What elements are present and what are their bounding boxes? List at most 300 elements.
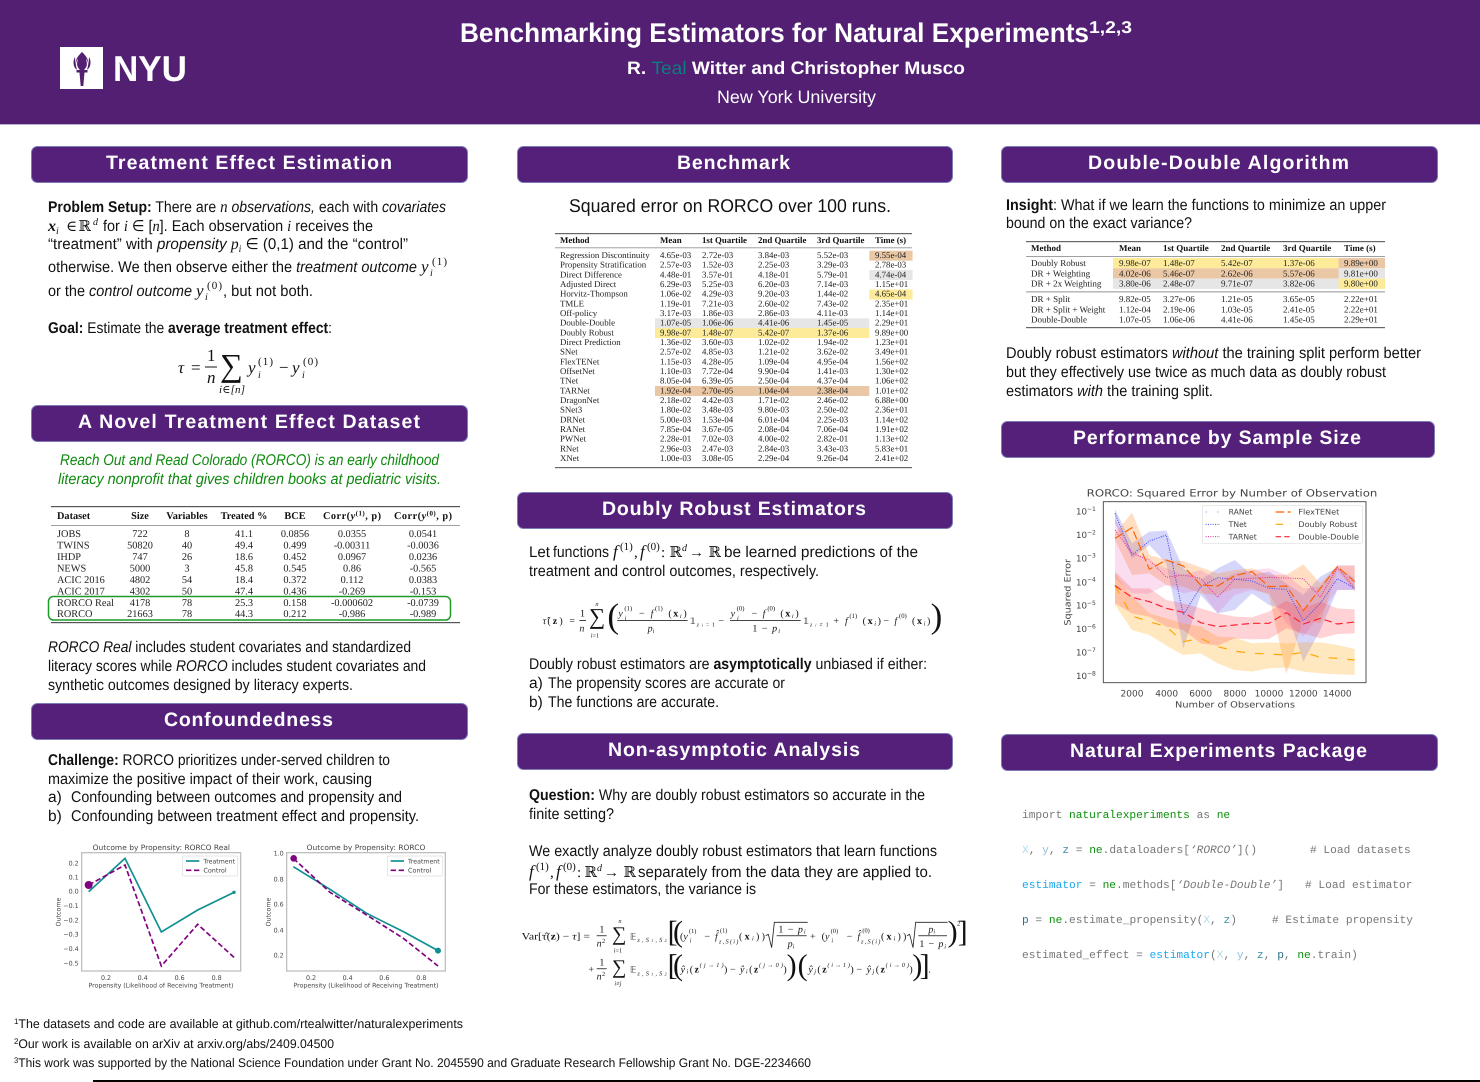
table: datasets: 3	[184, 564, 190, 574]
text block: asymptotically unbiased: b)	[529, 694, 543, 711]
table: double-double comparison: Time (s)	[1344, 243, 1376, 253]
code block: package usage	[1022, 809, 1413, 962]
chart: outcome by propensity RORCO: Outcome	[265, 898, 272, 926]
chart: squared error by number of observations: −4	[1087, 576, 1096, 583]
chart: outcome by propensity RORCO: 0.2	[306, 974, 316, 982]
table: benchmark results: SNet	[560, 347, 578, 357]
heading: A Novel Treatment Effect Dataset: A Novel Treatment Effect Dataset	[78, 411, 420, 433]
table: benchmark results: 2.86e-03	[758, 308, 790, 318]
table: benchmark results: 1.45e-05	[817, 318, 849, 328]
table: benchmark results: 1.80e-02	[660, 405, 691, 415]
table: benchmark results: 3.49e+01	[875, 347, 908, 357]
table: double-double comparison: 2.22e+01	[1344, 294, 1378, 304]
table: benchmark results: 1.37e-06	[817, 327, 849, 337]
formula: variance: ]	[958, 915, 968, 948]
table: datasets: 50	[182, 586, 192, 598]
table: double-double comparison: 5.42e-07	[1221, 258, 1253, 268]
code block: package usage: # Estimate propensity	[1272, 914, 1413, 927]
chart: outcome by propensity RORCO Real: Outcome by Propensity: RORCO Real	[93, 844, 230, 852]
formula: average treatment effect: −	[279, 358, 289, 377]
table: datasets: 0.212	[283, 609, 307, 620]
chart: outcome by propensity RORCO Real: −0.1	[63, 902, 79, 910]
formula: variance: (i→1)	[827, 962, 850, 969]
table: benchmark results: 1.04e-04	[758, 385, 790, 395]
table: double-double comparison: 4.41e-06	[1221, 315, 1253, 325]
formula: variance: n	[597, 938, 602, 949]
table: double-double comparison: 9.80e+00	[1344, 279, 1378, 289]
table: benchmark results: XNet	[560, 453, 580, 463]
text block: challenge: a)	[48, 789, 62, 806]
table: datasets: 25.3	[235, 598, 253, 609]
table: double-double comparison: 1.06e-06	[1163, 315, 1195, 325]
table: datasets: -0.986	[339, 609, 365, 620]
chart: outcome by propensity RORCO: 0.4	[274, 927, 284, 934]
table: datasets: 0.545	[283, 564, 307, 574]
table: benchmark results: 9.89e+00	[875, 327, 909, 337]
table: benchmark results: 6.39e-05	[702, 376, 734, 386]
formula: doubly robust estimator: f	[651, 608, 655, 619]
table: double-double comparison: 2.29e+01	[1344, 315, 1378, 325]
text block: learned functions: ,	[634, 545, 638, 561]
formula: doubly robust estimator: (x	[668, 608, 678, 619]
formula: doubly robust estimator: 1	[580, 608, 585, 619]
table: datasets: 0.0856	[281, 529, 309, 540]
formula: doubly robust estimator: (0)	[737, 605, 744, 612]
chart: outcome by propensity RORCO Real: −0.4	[63, 945, 79, 953]
formula: doubly robust estimator: −	[883, 615, 889, 626]
text block: question: finite setting?	[529, 806, 614, 823]
table: benchmark results: Direct Prediction	[560, 337, 621, 347]
table: datasets: -0.565	[410, 564, 436, 574]
logo: NYU	[60, 47, 187, 89]
text block: RORCO description: Reach Out and Read Colorado (RORCO) is an early childhood	[60, 452, 440, 469]
table: datasets: 0.0355	[338, 529, 366, 540]
formula: variance: ŷ	[807, 964, 813, 975]
chart: squared error by number of observations: 10	[1076, 671, 1087, 681]
table: benchmark results: Mean	[660, 235, 682, 245]
formula: doubly robust estimator: y	[617, 608, 623, 619]
text block: exact analysis: → ℝ	[604, 865, 637, 881]
heading: Natural Experiments Package: Natural Experiments Package	[1070, 740, 1367, 762]
formula: variance: 𝔼	[630, 932, 636, 942]
text block: problem setup: d	[93, 217, 99, 228]
text block: problem setup: (1)	[432, 256, 447, 268]
text block: problem setup: y	[419, 257, 429, 276]
table: benchmark results: 1.21e-02	[758, 347, 789, 357]
table: benchmark results: 4.11e-03	[817, 308, 848, 318]
table: datasets: 18.4	[235, 575, 253, 586]
text block: learned functions: f	[613, 542, 620, 561]
formula: variance: (j→0)	[759, 962, 783, 969]
table: double-double comparison: 2.62e-06	[1221, 268, 1253, 278]
table: benchmark results: 1.41e-03	[817, 366, 849, 376]
table: datasets: Dataset	[57, 511, 91, 522]
table: benchmark results: 2.41e+02	[875, 453, 908, 463]
table: benchmark results: 3.08e-05	[702, 453, 734, 463]
table: benchmark results: 2.96e-03	[660, 443, 692, 453]
table: benchmark results: 1.19e-01	[660, 298, 691, 308]
formula: variance: )	[948, 915, 958, 948]
table: double-double comparison	[1026, 241, 1385, 328]
formula: doubly robust estimator: i=1	[591, 632, 599, 639]
formula: average treatment effect: i	[258, 370, 261, 381]
text block: problem setup	[47, 197, 447, 303]
formula: variance: +	[810, 931, 816, 942]
text block: exact analysis: ,	[550, 865, 554, 881]
table: benchmark results: 3rd Quartile	[817, 235, 864, 245]
table: benchmark results: 1.53e-04	[702, 414, 734, 424]
table: datasets: 50820	[127, 540, 153, 552]
text block: asymptotically unbiased: a)	[529, 675, 543, 692]
text block: problem setup: i	[56, 226, 59, 237]
table: benchmark results: 3.62e-02	[817, 347, 848, 357]
chart: outcome by propensity RORCO Real: −0.5	[63, 960, 79, 967]
table: benchmark results: Time (s)	[875, 235, 906, 245]
formula: variance: z,S(i)	[719, 938, 738, 945]
table: double-double comparison: 1.12e-04	[1119, 304, 1151, 314]
title: 1,2,3	[1089, 18, 1132, 37]
table: double-double comparison: 9.98e-07	[1119, 258, 1151, 268]
table: benchmark results: 2.50e-02	[817, 405, 848, 415]
formula: doubly robust estimator: y	[730, 608, 735, 619]
legend	[1202, 506, 1362, 543]
formula: variance: ]	[920, 949, 930, 982]
formula: variance: 1 − p	[778, 924, 803, 935]
formula: variance: i	[933, 928, 935, 935]
formula: variance: y	[824, 931, 830, 942]
table: datasets: 44.3	[235, 609, 253, 620]
chart: squared error by number of observations: Number of Observations	[1175, 700, 1295, 710]
heading: Doubly Robust Estimators: Doubly Robust Estimators	[602, 498, 866, 520]
text block: exact analysis: : ℝ	[577, 865, 598, 881]
formula: variance: )	[724, 964, 727, 975]
table: benchmark results: 2.28e-01	[660, 434, 691, 444]
legend: Doubly Robust	[1298, 520, 1357, 529]
table: datasets: 0.0541	[409, 529, 437, 540]
table: benchmark results: 1.71e-02	[758, 395, 789, 405]
formula: variance	[522, 915, 968, 987]
chart: squared error by number of observations: −8	[1087, 670, 1096, 677]
table: benchmark results: 2.29e+01	[875, 318, 908, 328]
table: benchmark results: 6.20e-03	[758, 279, 790, 289]
table: benchmark results: 2.70e-05	[702, 385, 734, 395]
formula: variance: )	[787, 949, 797, 982]
table: datasets: , p)	[436, 511, 452, 522]
table: double-double comparison: 1.37e-06	[1283, 258, 1315, 268]
code block: package usage: # Load estimator	[1305, 879, 1412, 892]
text block: training split	[1006, 345, 1421, 400]
table: benchmark results: 2.84e-03	[758, 443, 790, 453]
formula: variance: (x	[739, 931, 750, 942]
text block: problem setup: or the control outcome	[48, 283, 192, 300]
heading: Non-asymptotic Analysis	[518, 734, 952, 770]
chart: outcome by propensity RORCO Real: Outcome	[55, 898, 62, 926]
formula: variance: i	[687, 968, 688, 975]
formula: variance: .	[928, 964, 931, 975]
formula: doubly robust estimator: zi=1	[696, 621, 715, 628]
table: benchmark results: 4.18e-01	[758, 269, 789, 279]
chart: outcome by propensity RORCO Real: 0.0	[69, 888, 79, 895]
formula: variance: i≠j	[614, 980, 621, 987]
code block: package usage: X, y, z = ne.dataloaders[‘RORCO’]()	[1022, 844, 1257, 857]
table: benchmark results: 7.43e-02	[817, 298, 848, 308]
table: benchmark results: 9.55e-04	[875, 250, 907, 260]
text block: asymptotically unbiased	[529, 656, 927, 711]
formula: doubly robust estimator: i	[737, 615, 739, 622]
text block: asymptotically unbiased: Doubly robust estimators are asymptotically unbiased if either:	[529, 656, 927, 673]
text block: exact analysis: separately from the data they are applied to.	[638, 864, 932, 881]
table: benchmark results: 5.00e-03	[660, 414, 692, 424]
formula: doubly robust estimator: (x	[863, 615, 873, 626]
text block: RORCO description	[58, 452, 441, 488]
table: benchmark results: 1.06e-06	[702, 318, 734, 328]
table: datasets: 0.499	[283, 540, 307, 552]
table: datasets: (1)	[356, 510, 365, 518]
formula: variance: )	[783, 964, 787, 975]
code block: package usage: import naturalexperiments as ne	[1022, 809, 1230, 822]
table: benchmark results: 7.72e-04	[702, 366, 734, 376]
formula: doubly robust estimator: p	[648, 623, 653, 634]
formula: variance: (i→0)	[886, 962, 909, 969]
table: benchmark results: 4.65e-04	[875, 289, 907, 299]
logo: NYU: NYU	[113, 48, 187, 89]
formula: doubly robust estimator: (	[607, 596, 619, 635]
table: double-double comparison: DR + Split	[1031, 294, 1071, 304]
formula: doubly robust estimator: i	[924, 620, 925, 627]
text block: training split: Doubly robust estimators without the training split perform better	[1006, 345, 1421, 362]
formula: doubly robust estimator: 𝟙	[690, 616, 696, 626]
table: benchmark results: 9.90e-04	[758, 366, 790, 376]
chart: squared error by number of observations: Squared Error	[1063, 559, 1073, 626]
text block: exact analysis: f	[556, 862, 563, 881]
table: double-double comparison: 1.03e-05	[1221, 304, 1253, 314]
heading: Non-asymptotic Analysis: Non-asymptotic Analysis	[608, 739, 860, 761]
table: benchmark results: 4.29e-03	[702, 289, 734, 299]
text block: learned functions: d	[682, 543, 688, 554]
formula: variance: n	[618, 918, 621, 925]
table: datasets: 78	[182, 609, 192, 620]
chart: squared error by number of observations: 10	[1076, 601, 1087, 611]
table: double-double comparison: Double-Double	[1031, 315, 1087, 325]
table: benchmark results: 5.42e-07	[758, 327, 790, 337]
formula: doubly robust estimator: (1)	[624, 605, 632, 612]
table: datasets: -0.0036	[407, 540, 439, 552]
table: benchmark results: RNet	[560, 443, 579, 453]
heading: Double-Double Algorithm: Double-Double Algorithm	[1088, 152, 1349, 174]
table: datasets: 40	[182, 540, 192, 552]
heading: Natural Experiments Package	[1002, 734, 1438, 770]
table: double-double comparison: 9.81e+00	[1344, 268, 1378, 278]
text block: problem setup: i	[205, 292, 208, 303]
formula: doubly robust estimator: 𝟙	[803, 616, 809, 626]
heading: Confoundedness: Confoundedness	[164, 709, 333, 731]
table: benchmark results: 4.42e-03	[702, 395, 734, 405]
text block: problem setup: , but not both.	[223, 283, 313, 300]
formula: variance: Var[τ̂(z) − τ] =	[522, 931, 590, 942]
table: benchmark results: 2.38e-04	[817, 385, 849, 395]
text block: learned functions: Let	[529, 544, 551, 561]
table: benchmark results: 1.13e+02	[875, 434, 908, 444]
table: benchmark results: Horvitz-Thompson	[560, 289, 628, 299]
table: datasets: 0.0967	[338, 552, 366, 563]
formula: variance: )	[909, 964, 913, 975]
formula: variance: j	[813, 968, 816, 975]
table: benchmark results: 2.25e-03	[758, 260, 790, 270]
table: benchmark results: 1.10e-03	[660, 366, 692, 376]
formula: variance: (	[798, 949, 808, 982]
table: benchmark results: 4.95e-04	[817, 356, 849, 366]
formula: variance: 1	[599, 957, 604, 968]
table: datasets: 4178	[130, 598, 150, 609]
chart: squared error by number of observations: 6000	[1189, 688, 1212, 699]
formula: variance: )	[850, 964, 854, 975]
chart: outcome by propensity RORCO: 0.2	[274, 952, 284, 959]
footnotes: This work was supported by the National Science Foundation under Grant No. 2045590 and Graduate Research Fellowship Grant No. DGE-2234660	[18, 1056, 811, 1070]
table: datasets: 0.436	[283, 586, 307, 598]
formula: variance: z,S1,S2	[637, 937, 667, 944]
table: datasets: 0.86	[343, 564, 361, 574]
table: benchmark results: 2.08e-04	[758, 424, 790, 434]
table: benchmark results: 1.01e+02	[875, 385, 908, 395]
heading: Benchmark	[518, 146, 952, 182]
table: datasets: 49.4	[235, 540, 253, 552]
table: benchmark results: 2.25e-03	[817, 414, 849, 424]
formula: variance: 2	[957, 920, 960, 927]
formula: variance: z	[881, 964, 885, 975]
formula: variance: z,S(i)	[861, 938, 880, 945]
chart: outcome by propensity RORCO Real: 0.6	[175, 974, 185, 982]
table: benchmark results: 2.50e-04	[758, 376, 790, 386]
table: datasets: 41.1	[235, 529, 253, 540]
table: benchmark results: Propensity Stratification	[560, 260, 647, 270]
chart: squared error by number of observations: 4000	[1155, 688, 1178, 699]
table: benchmark results: 9.26e-04	[817, 453, 849, 463]
formula: variance: f̂	[715, 930, 719, 942]
table: benchmark results	[555, 233, 913, 468]
table: datasets: IHDP	[57, 552, 81, 563]
formula: doubly robust estimator: i	[653, 628, 654, 635]
formula: variance: ∑	[612, 956, 626, 978]
table: datasets: 47.4	[235, 586, 253, 598]
formula: doubly robust estimator: )	[795, 608, 799, 619]
formula: variance: (	[673, 949, 683, 982]
formula: variance: ∑	[612, 923, 626, 945]
formula: doubly robust estimator: i	[792, 613, 794, 620]
formula: variance: z,S1,S2	[637, 970, 667, 977]
formula: variance: y	[682, 931, 688, 942]
table: benchmark results: 8.05e-04	[660, 376, 692, 386]
table: datasets: Variables	[166, 511, 208, 522]
table: benchmark results: 3.29e-03	[817, 260, 849, 270]
chart: squared error by number of observations: 10	[1076, 530, 1087, 540]
formula: doubly robust estimator: −	[752, 608, 757, 619]
table: double-double comparison: 9.82e-05	[1119, 294, 1151, 304]
table: double-double comparison: DR + 2x Weighting	[1031, 279, 1102, 289]
chart: outcome by propensity RORCO Real: Treatment	[203, 858, 235, 865]
table: benchmark results: 1.36e-02	[660, 337, 691, 347]
table: benchmark results: 4.41e-06	[758, 318, 790, 328]
formula: doubly robust estimator: i	[625, 615, 626, 622]
table: datasets: RORCO Real	[57, 598, 114, 609]
formula: variance: p	[788, 938, 793, 949]
table: double-double comparison: 3.82e-06	[1283, 279, 1315, 289]
table: benchmark results: Doubly Robust	[560, 327, 614, 337]
text block: question: Question: Why are doubly robust estimators so accurate in the	[529, 787, 925, 804]
formula: average treatment effect: i	[302, 370, 305, 381]
table: benchmark results: 1.14e+01	[875, 308, 908, 318]
formula: variance: z	[822, 964, 827, 975]
chart: squared error by number of observations: 14000	[1323, 688, 1352, 699]
table: datasets: 747	[132, 552, 148, 563]
table: benchmark results: 3.48e-03	[702, 405, 734, 415]
formula: variance: (	[822, 931, 825, 942]
formula: average treatment effect: ∑	[220, 347, 243, 383]
formula: variance: (	[680, 931, 683, 942]
chart: squared error by number of observations	[1063, 488, 1377, 710]
formula: doubly robust estimator: (0)	[899, 612, 907, 620]
formula: variance: (j→1)	[700, 962, 724, 969]
table: double-double comparison: 1.45e-05	[1283, 315, 1315, 325]
table: benchmark results: 2nd Quartile	[758, 235, 806, 245]
text block: RORCO Real explanation: synthetic outcomes designed by literacy experts.	[48, 677, 353, 694]
table: double-double comparison: 1.21e-05	[1221, 294, 1253, 304]
table: benchmark results: 1.06e-02	[660, 289, 691, 299]
text block: problem setup: Problem Setup: There are n observations, each with covariates	[48, 197, 446, 216]
formula: variance: [	[668, 915, 678, 948]
table: benchmark results: 9.80e-03	[758, 405, 790, 415]
table: double-double comparison: 2.19e-06	[1163, 304, 1195, 314]
table: datasets: 54	[182, 575, 192, 586]
table: datasets: 26	[182, 552, 192, 563]
legend: RANet	[1229, 508, 1252, 517]
formula: doubly robust estimator: −	[718, 615, 724, 626]
formula: average treatment effect: n	[207, 368, 216, 387]
text block: RORCO Real explanation	[48, 639, 426, 694]
table: double-double comparison: Doubly Robust	[1031, 258, 1086, 268]
table: datasets: 0.0383	[409, 575, 437, 586]
legend: Double-Double	[1298, 533, 1359, 541]
text block: learned functions: f	[640, 542, 647, 561]
table: benchmark results: 7.06e-04	[817, 424, 849, 434]
table: benchmark results: 1.23e+01	[875, 337, 908, 347]
table: datasets: 8	[184, 529, 190, 540]
text block: RORCO description: literacy nonprofit that gives children books at pediatric visits.	[58, 471, 441, 488]
table: benchmark results: 1.94e-02	[817, 337, 848, 347]
table: double-double comparison: DR + Split + Weight	[1031, 304, 1106, 314]
table: datasets: Corr(y	[323, 511, 355, 522]
text block: challenge: Challenge: RORCO prioritizes under-served children to	[48, 752, 390, 769]
table: double-double comparison: Mean	[1119, 243, 1141, 253]
code block: package usage: estimated_effect = estimator(X, y, z, p, ne.train)	[1022, 949, 1358, 962]
formula: variance: ))	[756, 931, 765, 942]
table: benchmark results: 1.06e+02	[875, 376, 908, 386]
text block: asymptotically unbiased: The propensity scores are accurate or	[548, 675, 785, 692]
formula: doubly robust estimator: (1)	[655, 605, 663, 612]
authors: R. Teal Witter and Christopher Musco	[627, 58, 965, 78]
formula: doubly robust estimator: i	[680, 613, 682, 620]
table: benchmark results: Regression Discontinuity	[560, 250, 650, 260]
formula: doubly robust estimator: −	[639, 608, 645, 619]
text block: goal: Goal: Estimate the average treatment effect:	[48, 320, 332, 337]
formula: variance: i	[690, 937, 691, 944]
table: double-double comparison: 2.48e-07	[1163, 279, 1195, 289]
formula: average treatment effect: (1)	[258, 356, 273, 368]
formula: average treatment effect	[178, 346, 318, 396]
text block: problem setup: ∈ (0,1) and the “control”	[241, 236, 408, 253]
formula: variance: ŷ	[866, 964, 871, 975]
table: double-double comparison: 2.22e+01	[1344, 304, 1378, 314]
text block: insight	[1006, 197, 1386, 232]
